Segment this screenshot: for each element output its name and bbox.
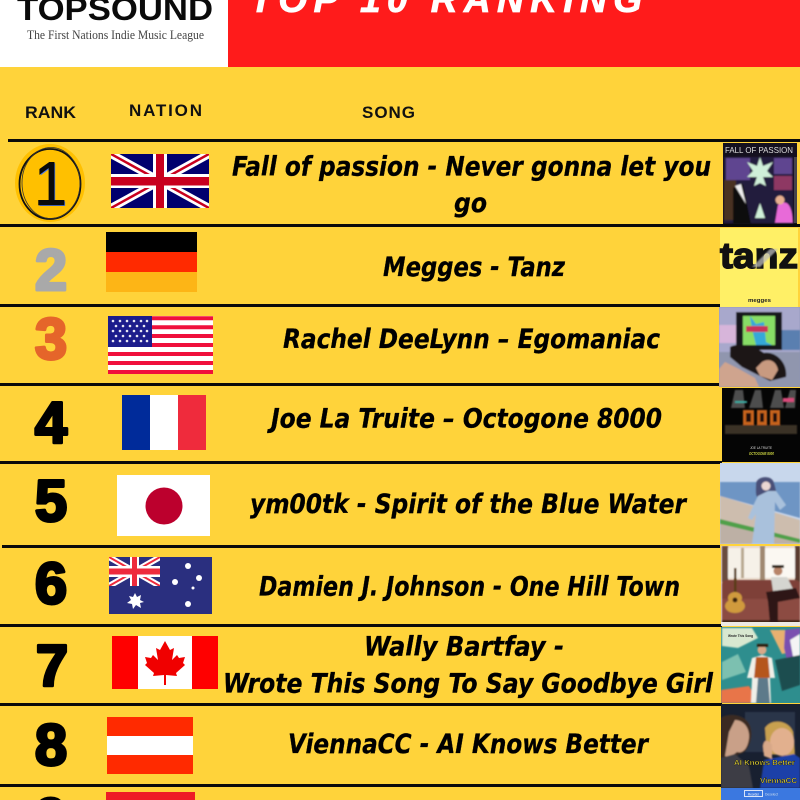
song 7 bbox=[223, 632, 714, 700]
album cover 3: Egomaniac bbox=[719, 307, 800, 387]
album cover 8: AI Knows Better: Reorder bbox=[748, 792, 760, 796]
album cover 2: Tanz: tanz bbox=[720, 235, 798, 276]
flag: United States bbox=[108, 316, 213, 374]
album cover 8: AI Knows Better: ViennaCC bbox=[760, 778, 797, 785]
song 7: Wrote This Song To Say Goodbye Girl bbox=[223, 668, 714, 700]
rank 1 badge bbox=[15, 144, 85, 222]
album cover 4: Octogone 8000: JOE LA TRUITE bbox=[750, 445, 772, 450]
column heading: song: SONG bbox=[362, 103, 415, 122]
album cover 1: Fall of Passion: FALL OF PASSION bbox=[725, 145, 793, 155]
album cover 8: AI Knows Better bbox=[721, 704, 800, 800]
song 1: Fall of passion - Never gonna let you bbox=[232, 152, 711, 182]
rank 1 badge: 1 bbox=[34, 150, 67, 219]
song 7: Wally Bartfay - bbox=[364, 632, 564, 662]
flag: Japan bbox=[117, 475, 210, 536]
rank 6: 6 bbox=[35, 552, 67, 616]
song 5: ym00tk - Spirit of the Blue Water bbox=[250, 489, 687, 520]
flag: Germany bbox=[106, 232, 197, 292]
header: logo panel bbox=[0, 0, 228, 67]
flag: France bbox=[122, 395, 206, 450]
song 3: Rachel DeeLynn – Egomaniac bbox=[283, 324, 660, 355]
flag: rank 9 partial bbox=[106, 792, 195, 800]
rank 1 badge: 1 bbox=[35, 151, 68, 220]
flag: Austria bbox=[107, 717, 193, 774]
album cover 7: Wrote This Song: Wrote This Song bbox=[728, 634, 754, 638]
logo tagline: The First Nations Indie Music League bbox=[27, 28, 204, 42]
album cover 6: One Hill Town bbox=[721, 546, 800, 626]
rank 8: 8 bbox=[35, 713, 67, 778]
rank 5: 5 bbox=[35, 469, 67, 534]
album cover 2: Tanz bbox=[720, 228, 798, 307]
song 1: go bbox=[454, 188, 487, 219]
song 8: ViennaCC - AI Knows Better bbox=[288, 729, 649, 760]
song 4: Joe La Truite – Octogone 8000 bbox=[267, 404, 662, 434]
rank 3: 3 bbox=[35, 307, 67, 372]
column heading: nation: NATION bbox=[129, 101, 202, 120]
album cover 7: Wrote This Song bbox=[721, 627, 800, 703]
album cover 2: Tanz: megges bbox=[748, 298, 771, 304]
flag: Australia bbox=[109, 557, 212, 614]
song 6: Damien J. Johnson - One Hill Town bbox=[259, 572, 680, 602]
song 2: Megges - Tanz bbox=[383, 252, 565, 283]
flag: Canada bbox=[112, 636, 218, 689]
flag: United Kingdom bbox=[111, 154, 209, 208]
album cover 8: AI Knows Better: AI Knows Better bbox=[734, 760, 795, 767]
header: title banner bbox=[228, 0, 800, 67]
album cover 4: Octogone 8000: OCTOGONE 8000 bbox=[749, 451, 774, 456]
album cover 5: Spirit of the Blue Water bbox=[720, 463, 800, 544]
rank 2: 2 bbox=[35, 238, 67, 303]
rank 7: 7 bbox=[36, 634, 68, 698]
album cover 1: Fall of Passion bbox=[723, 143, 800, 224]
album cover 8: AI Knows Better: Deselect bbox=[765, 792, 778, 796]
rank 4: 4 bbox=[35, 390, 67, 456]
album cover 4: Octogone 8000 bbox=[722, 388, 800, 462]
column heading: rank: RANK bbox=[25, 103, 77, 122]
song 1 bbox=[232, 152, 711, 219]
